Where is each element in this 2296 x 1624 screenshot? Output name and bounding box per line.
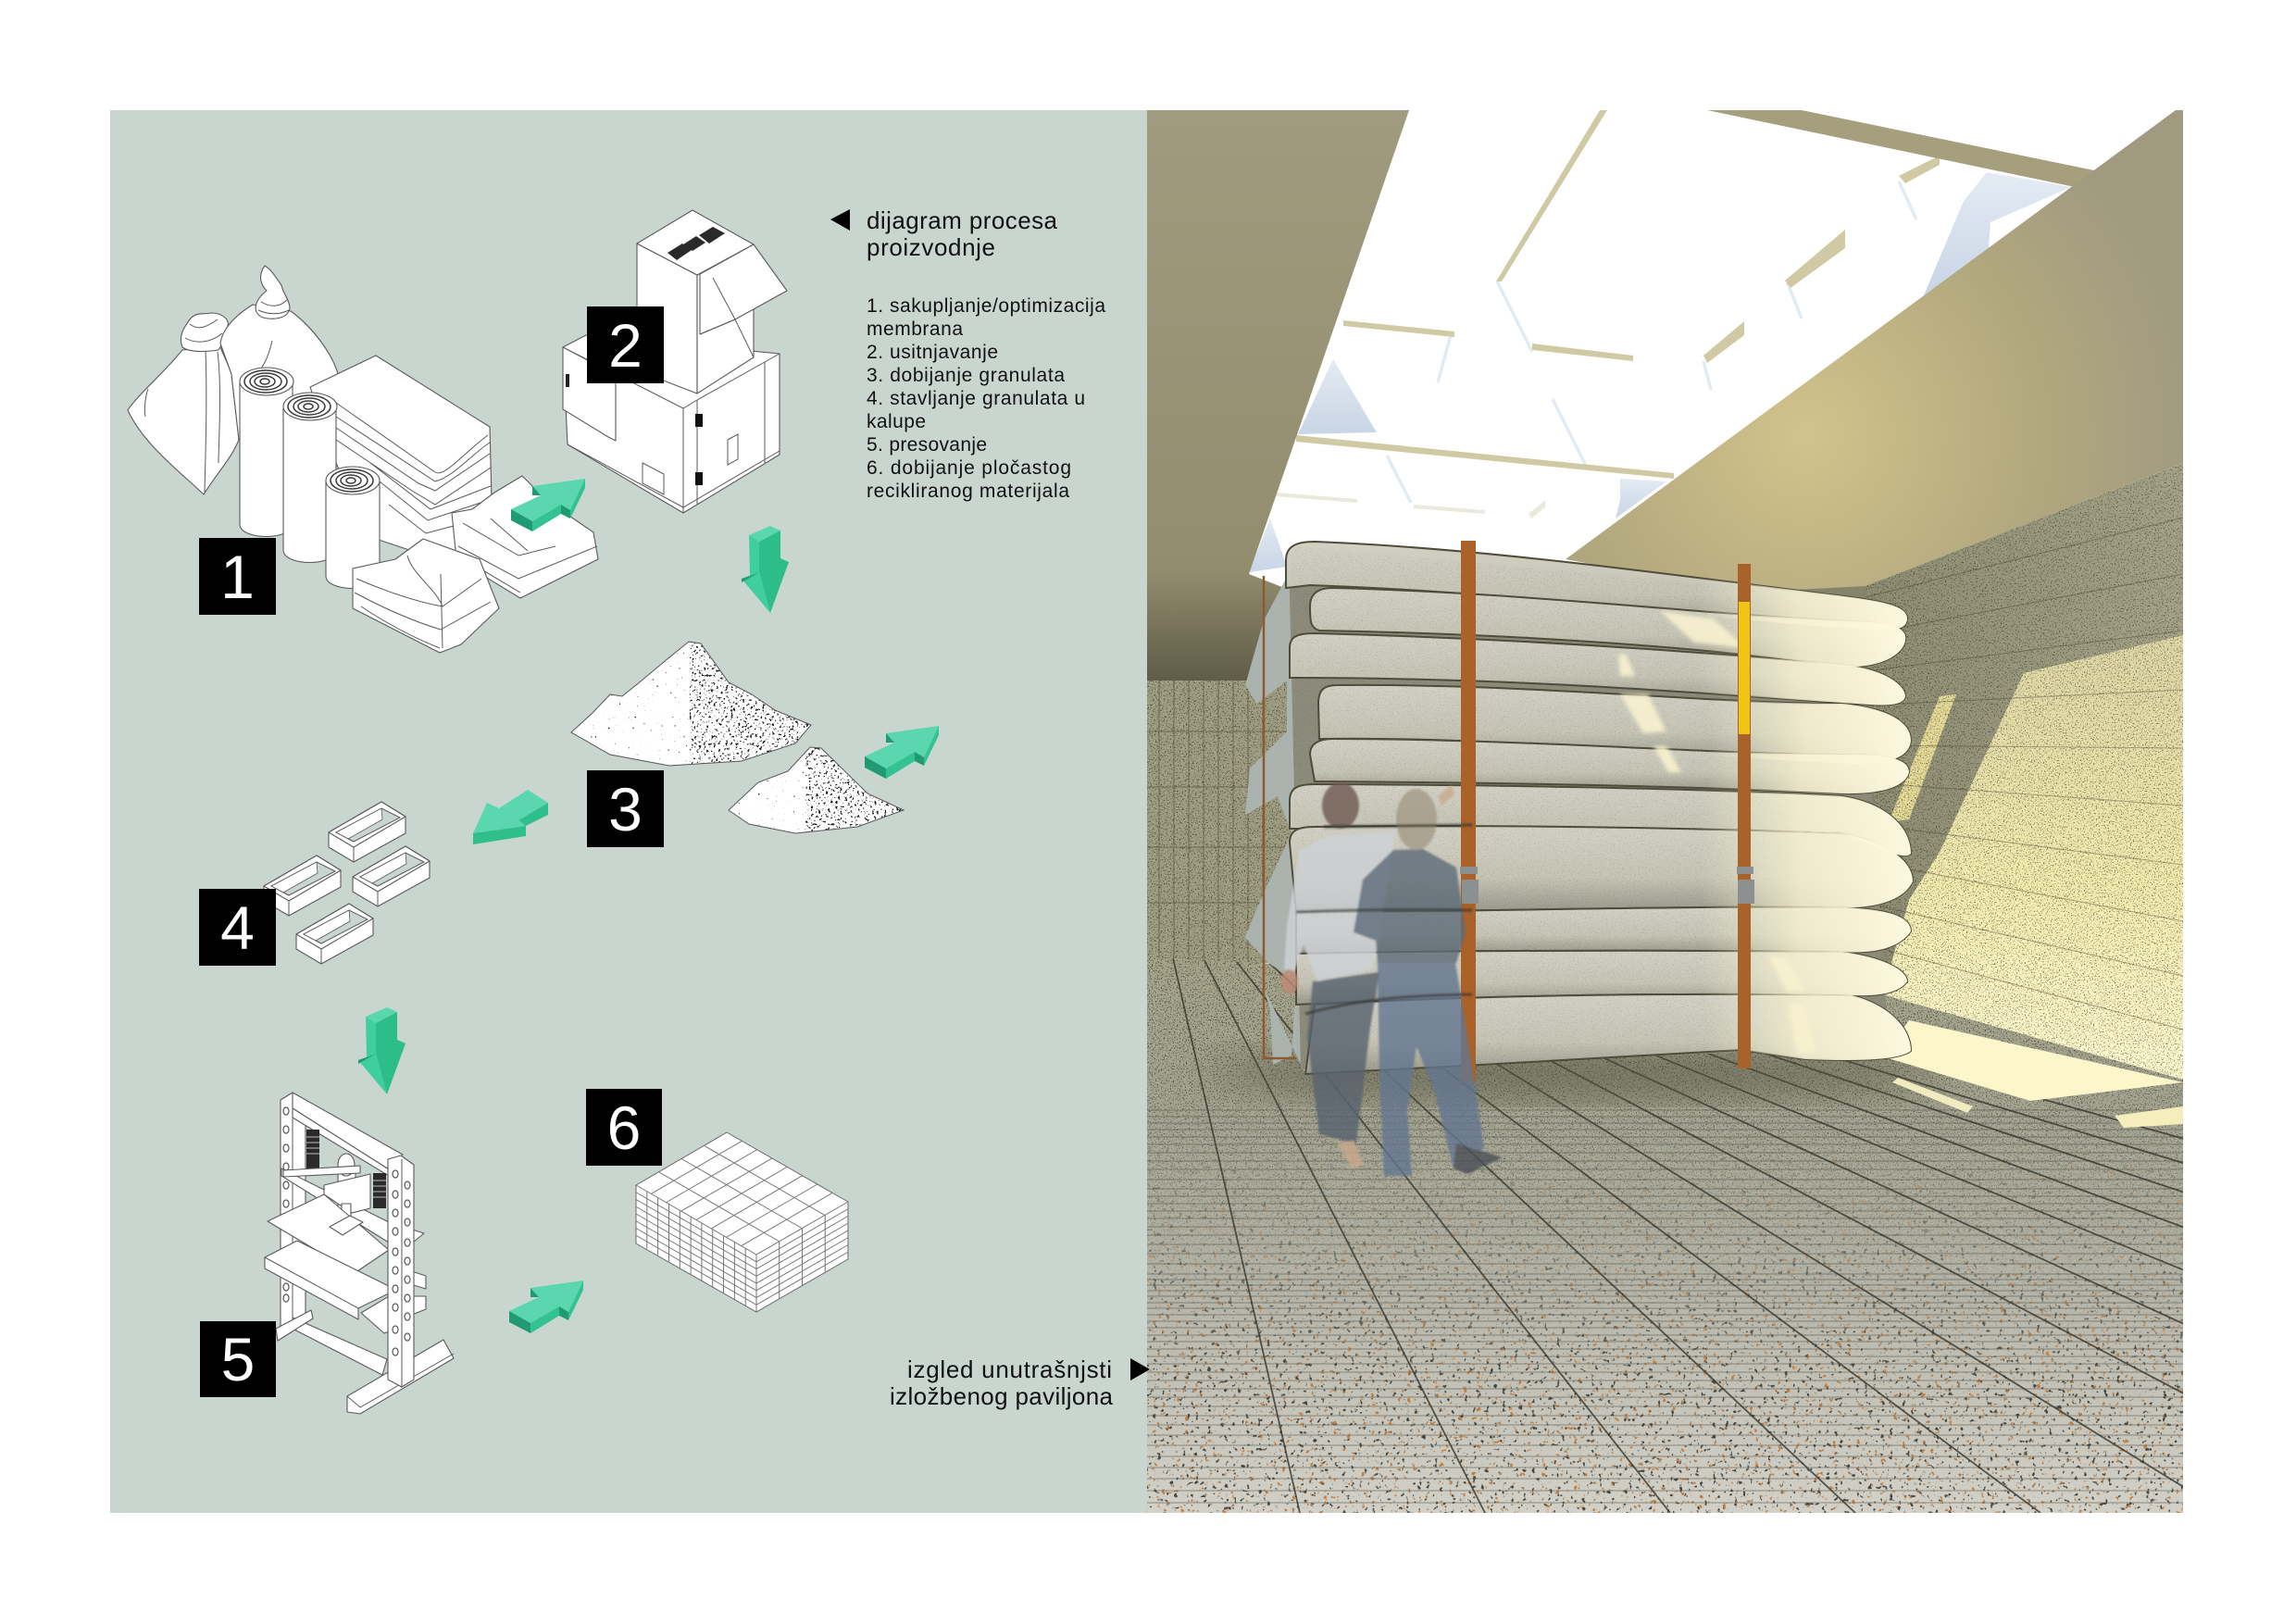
arrow: step 3 right (865, 726, 939, 779)
back area behind stack (1797, 579, 1884, 805)
springs (306, 1130, 319, 1168)
text block: process steps list: 6. dobijanje pločastog (867, 457, 1071, 479)
roll 1 (240, 381, 293, 537)
bag right (220, 305, 338, 463)
skylight blue reveals (1249, 172, 2071, 572)
side panel (563, 347, 616, 441)
pointer triangle (1130, 1358, 1150, 1380)
arrow: step 4 to step 5 (358, 1007, 406, 1094)
people (translucent figures) (1281, 782, 1503, 1176)
number badge 3 (587, 770, 664, 847)
caption: pavilion interior (890, 1355, 1150, 1410)
strap 1 (1461, 541, 1476, 1082)
lower plate (265, 1241, 396, 1319)
right inclined beam (1566, 110, 2183, 593)
man (1281, 782, 1395, 1168)
floor tile joints (1172, 958, 2183, 1513)
number badge 6: 6 (607, 1093, 641, 1162)
illustration: collected membranes (step 1) (128, 266, 598, 653)
text block: process steps list: kalupe (867, 411, 926, 432)
text block: process steps list: 5. presovanje (867, 434, 987, 456)
sheet stack (310, 356, 492, 556)
number badge 2: 2 (608, 311, 643, 380)
illustration: stacked recycled panels (step 6) (636, 1132, 848, 1312)
heading: process diagram: proizvodnje (867, 233, 995, 261)
heading: process diagram (830, 206, 1058, 261)
number badge 5 (200, 1321, 276, 1397)
panel: process diagram background (110, 110, 1147, 1513)
right column (388, 1156, 414, 1387)
text block: process steps list (867, 295, 1105, 502)
left column (281, 1093, 306, 1326)
vents (668, 227, 725, 260)
panel: interior pavilion render (1147, 110, 2296, 1513)
pointer triangle (830, 209, 850, 231)
top beam (293, 1093, 403, 1169)
roll 3 (326, 481, 380, 589)
back shelves (389, 1222, 424, 1243)
jack (338, 1168, 356, 1209)
number badge 6 (586, 1089, 662, 1166)
cushion gaps showing through figures (1296, 825, 1472, 1014)
illustration: moulds (step 4) (264, 802, 430, 964)
left ceiling plane (1147, 110, 1409, 681)
sunlight streaks (1618, 611, 1816, 1054)
number badge 1: 1 (220, 543, 255, 611)
upper cross beam (1707, 110, 2094, 187)
left wall (1147, 681, 1304, 963)
number badge 4 (199, 889, 276, 966)
sun patch on right wall (1882, 635, 2183, 1083)
text block: process steps list: 1. sakupljanje/optimizacija (867, 295, 1105, 317)
floor tile fine lines (1147, 1110, 2183, 1503)
second beam (281, 1168, 389, 1243)
heading: process diagram: dijagram procesa (867, 206, 1058, 234)
text block: process steps list: 2. usitnjavanje (867, 342, 998, 363)
upper plate (268, 1194, 389, 1273)
bag left (128, 347, 239, 494)
sun patches on floor (1882, 1020, 2183, 1101)
number badge 3: 3 (608, 775, 643, 843)
strap 2 sunlit part (1739, 602, 1750, 734)
woman (1354, 785, 1503, 1176)
floor (1147, 957, 2183, 1513)
roll 2 (283, 406, 336, 563)
stack backing (1289, 556, 1889, 1069)
illustration: granulate piles (step 3) (565, 639, 907, 836)
shadow under stack (1204, 1046, 1944, 1102)
text block: process steps list: recikliranog materijala (867, 481, 1069, 502)
small shelf (361, 1296, 407, 1333)
frayed membrane edge (1245, 581, 1305, 1072)
text block: process steps list: 3. dobijanje granulata (867, 365, 1065, 386)
handle (283, 1166, 360, 1177)
caption: pavilion interior: izložbenog paviljona (890, 1382, 1114, 1410)
skylight pale frame strips (1276, 110, 1940, 518)
number badge 1 (199, 538, 276, 615)
illustration: shredder machine (step 2) (563, 210, 787, 513)
crumpled pile right (452, 476, 598, 598)
cross bar base (293, 1318, 387, 1375)
text block: process steps list: 4. stavljanje granulata u (867, 388, 1085, 409)
right wall (1866, 463, 2183, 1080)
illustration: hydraulic press (step 5) (265, 1093, 454, 1414)
text block: process steps list: membrana (867, 319, 963, 340)
buckles (1460, 867, 1754, 904)
hopper (637, 244, 697, 394)
arrow: step 2 to step 3 (742, 526, 789, 613)
crumpled pile lower (353, 539, 499, 653)
stack of membrane cushions (1286, 542, 1913, 1074)
foot (347, 1340, 454, 1414)
arrow: step 3 to step 4 (473, 790, 548, 844)
arrow: step 1 to step 2 (511, 479, 585, 531)
strap 2 (1738, 564, 1751, 1068)
number badge 5: 5 (221, 1325, 255, 1393)
skylight pale reveal lines (1387, 181, 1916, 503)
number badge 4: 4 (220, 893, 255, 962)
arrow: step 5 to step 6 (509, 1280, 583, 1333)
number badge 2 (587, 306, 664, 383)
caption: pavilion interior: izgled unutrašnjsti (907, 1355, 1112, 1383)
rope frame left (1264, 576, 1296, 1058)
